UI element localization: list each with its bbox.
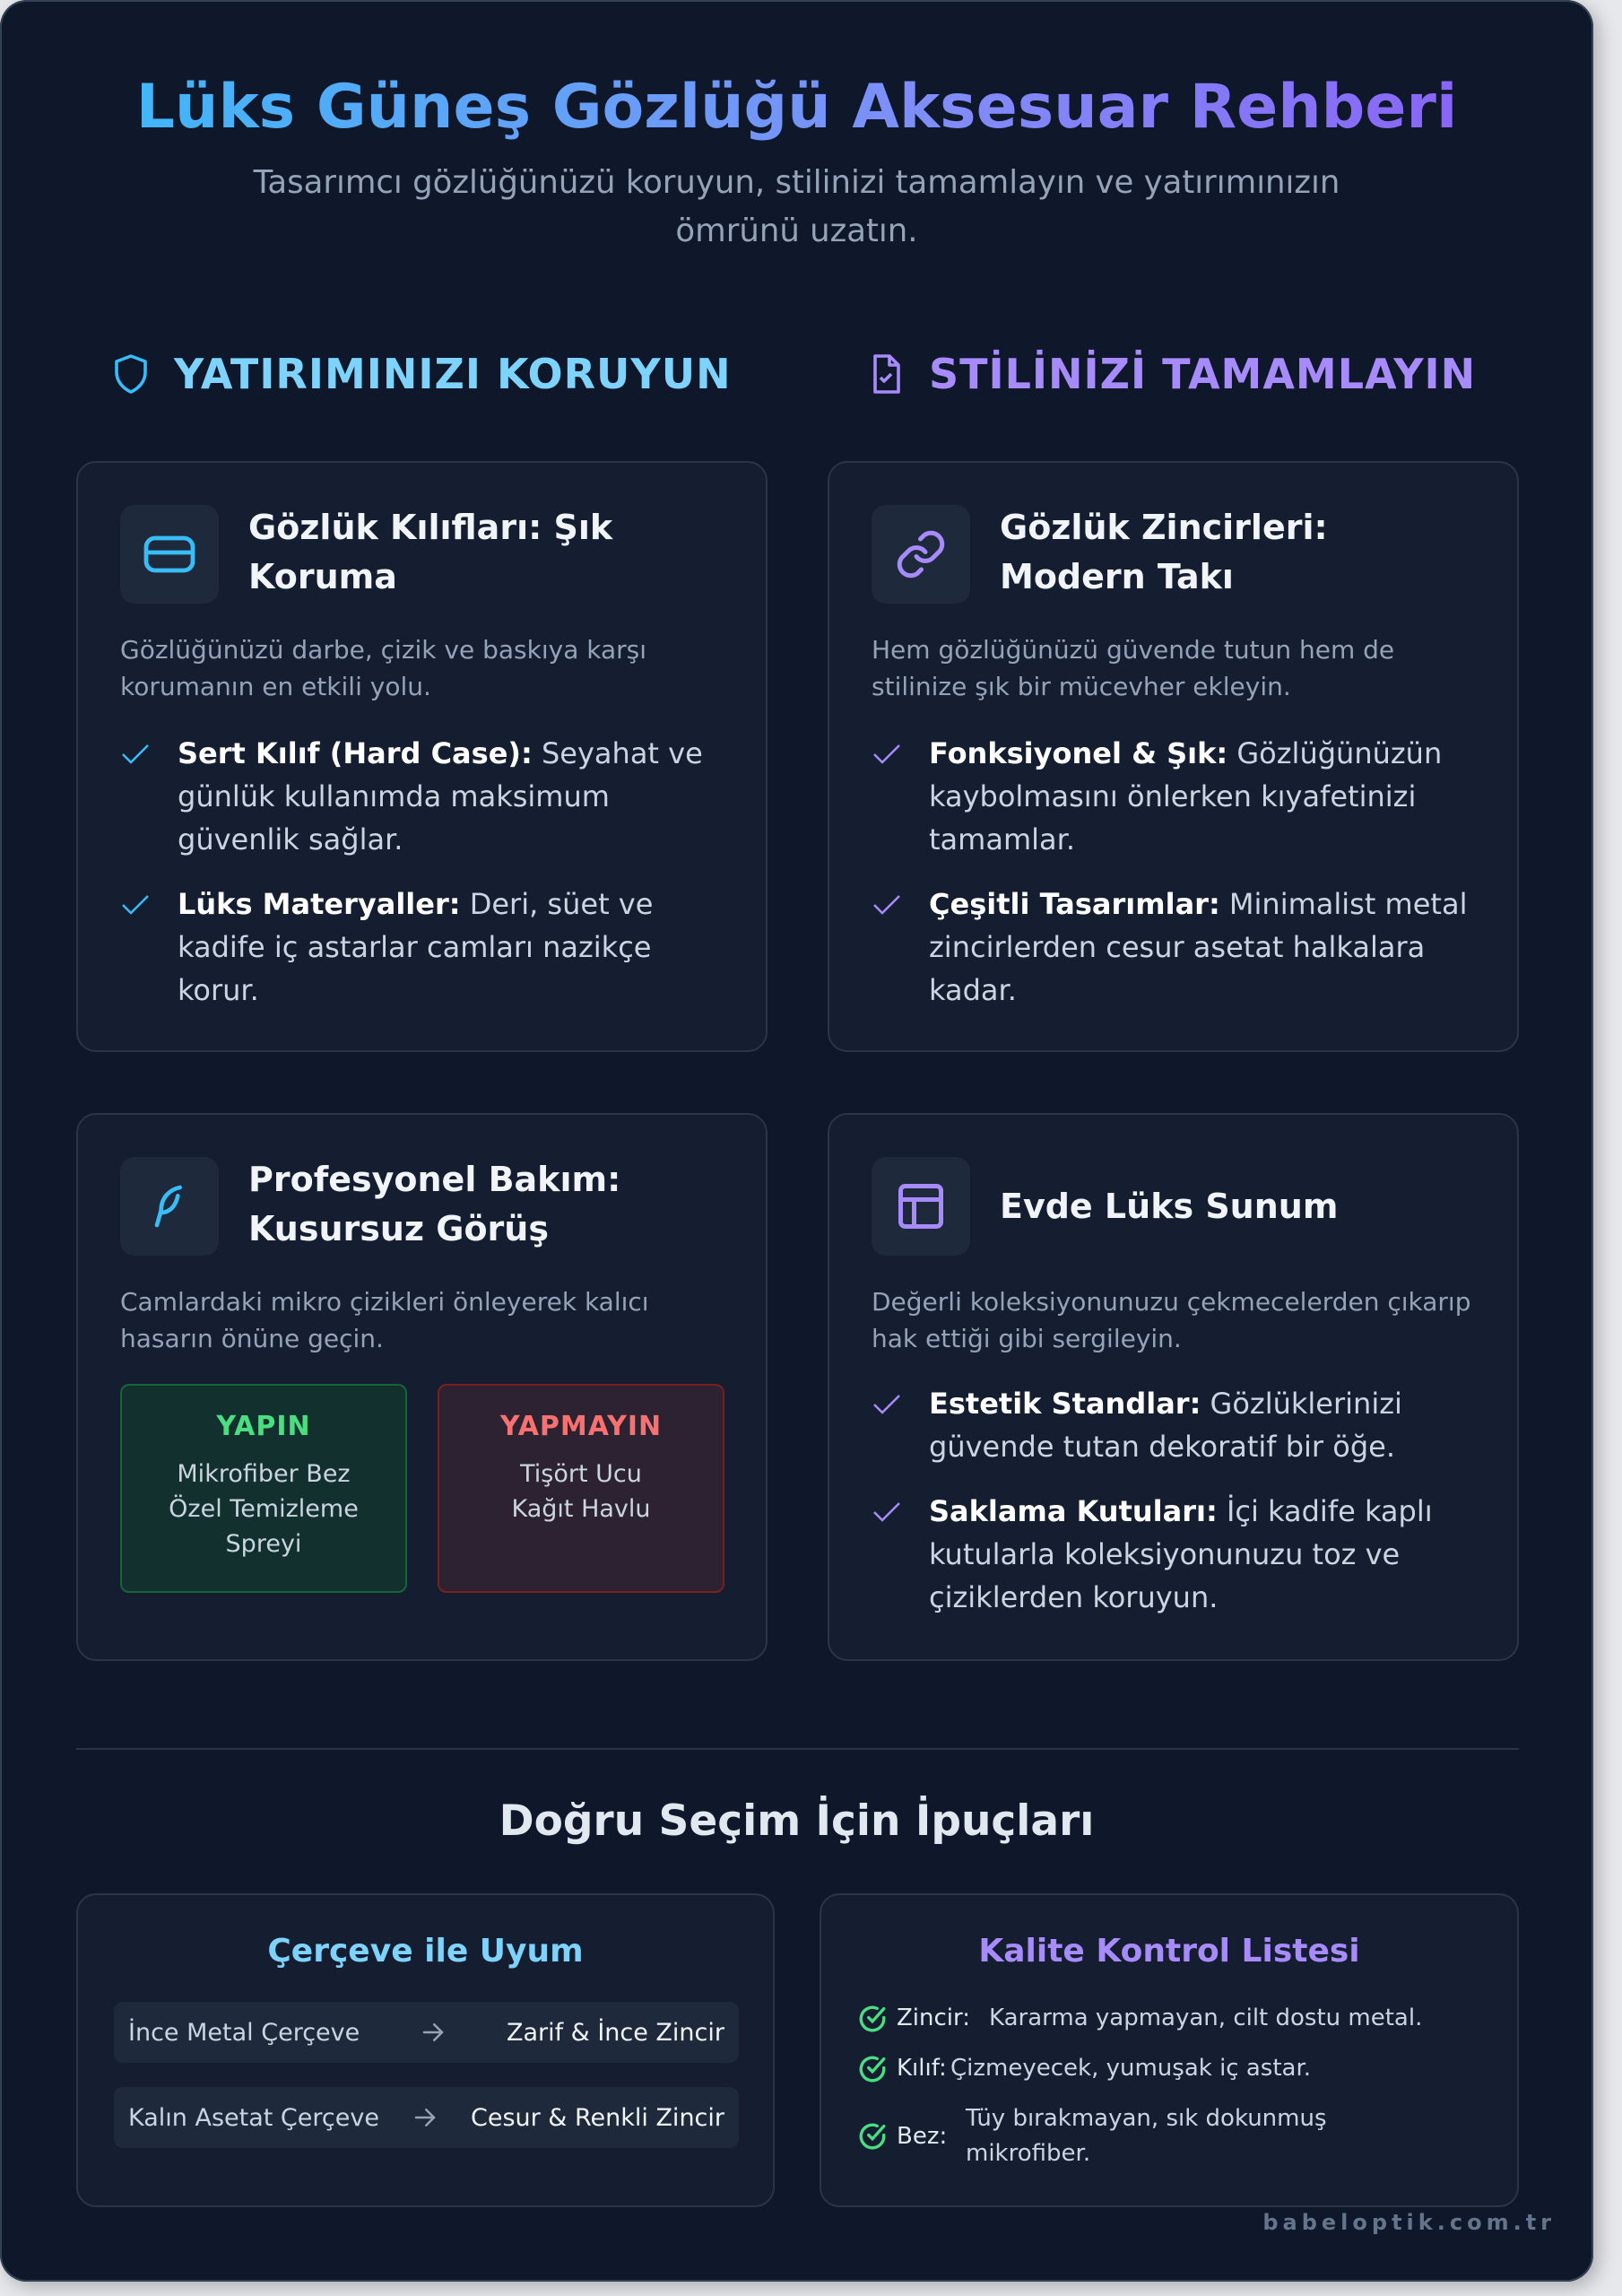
list: Sert Kılıf (Hard Case): Seyahat ve günlük kullanımda maksimum güvenlik sağlar. xyxy=(178,736,703,857)
panel: cases xyxy=(76,461,768,1052)
tips heading: Doğru Seçim İçin İpuçları xyxy=(499,1796,1094,1846)
panel: chains xyxy=(828,461,1519,1052)
row 2: Cesur & Renkli Zincir xyxy=(471,2104,724,2131)
panel: quality checklist xyxy=(820,1893,1519,2207)
check 1: Kararma yapmayan, cilt dostu metal. xyxy=(989,2005,1422,2031)
check 2: Çizmeyecek, yumuşak iç astar. xyxy=(950,2055,1311,2082)
panel: display xyxy=(828,1113,1519,1661)
section heading: protect: YATIRIMINIZI KORUYUN xyxy=(174,350,732,398)
description: Değerli koleksiyonunuzu çekmecelerden çıkarıp hak ettiği gibi sergileyin. xyxy=(872,1287,1470,1353)
list xyxy=(122,736,703,1007)
list: Fonksiyonel & Şık: Gözlüğünüzün kaybolmasını önlerken kıyafetinizi tamamlar. xyxy=(929,736,1442,857)
subtitle: Tasarımcı gözlüğünüzü koruyun, stilinizi tamamlayın ve yatırımınızın xyxy=(254,164,1340,201)
list: Estetik Standlar: Gözlüklerinizi güvende tutan dekoratif bir öğe. xyxy=(929,1387,1402,1464)
description: Hem gözlüğünüzü güvende tutun hem de stilinize şık bir mücevher ekleyin. xyxy=(872,635,1394,701)
subtitle: ömrünü uzatın. xyxy=(675,213,918,249)
icon: link xyxy=(872,505,970,604)
do box: Spreyi xyxy=(226,1530,301,1558)
list: Çeşitli Tasarımlar: Minimalist metal zincirlerden cesur asetat halkalara kadar. xyxy=(929,887,1467,1007)
description: Camlardaki mikro çizikleri önleyerek kalıcı hasarın önüne geçin. xyxy=(120,1287,649,1353)
list: Lüks Materyaller: Deri, süet ve kadife iç astarlar camları nazikçe korur. xyxy=(178,887,653,1007)
dont box: Tişört Ucu xyxy=(520,1460,642,1488)
dont box: YAPMAYIN xyxy=(500,1411,662,1442)
heading: Gözlük Zincirleri: Modern Takı xyxy=(1000,508,1328,596)
do box: YAPIN xyxy=(216,1411,311,1442)
icon: case xyxy=(120,505,219,604)
heading: Evde Lüks Sunum xyxy=(1000,1187,1338,1226)
heading: Kalite Kontrol Listesi xyxy=(978,1933,1360,1970)
icon: document xyxy=(873,354,900,394)
row 1 xyxy=(114,2002,739,2063)
check 3: Bez: xyxy=(897,2122,947,2149)
list xyxy=(873,1387,1433,1614)
dont box xyxy=(438,1384,724,1593)
row 2: Kalın Asetat Çerçeve xyxy=(128,2104,379,2131)
icon: layout xyxy=(872,1157,970,1256)
do box: Özel Temizleme xyxy=(169,1495,359,1523)
icon: feather xyxy=(120,1157,219,1256)
row 1: İnce Metal Çerçeve xyxy=(128,2018,360,2047)
title: Lüks Güneş Gözlüğü Aksesuar Rehberi xyxy=(136,72,1457,143)
heading: Profesyonel Bakım: Kusursuz Görüş xyxy=(248,1160,620,1248)
do box xyxy=(120,1384,407,1593)
list xyxy=(873,736,1467,1007)
section heading: style: STİLİNİZİ TAMAMLAYIN xyxy=(929,350,1476,398)
panel: frame match xyxy=(76,1893,775,2207)
footer: babeloptik.com.tr xyxy=(1262,2210,1556,2235)
check 2: Kılıf: xyxy=(897,2055,947,2082)
check 1: Zincir: xyxy=(897,2005,970,2031)
panel: care xyxy=(76,1113,768,1661)
description: Gözlüğünüzü darbe, çizik ve baskıya karşı korumanın en etkili yolu. xyxy=(120,635,646,701)
check 3: Tüy bırakmayan, sık dokunmuş mikrofiber. xyxy=(966,2105,1327,2167)
heading: Çerçeve ile Uyum xyxy=(267,1933,584,1970)
do box: Mikrofiber Bez xyxy=(177,1460,351,1488)
dont box: Kağıt Havlu xyxy=(511,1495,651,1523)
icon: shield xyxy=(115,354,147,394)
subtitle xyxy=(253,164,1340,249)
heading: Gözlük Kılıfları: Şık Koruma xyxy=(248,508,612,596)
row 1: Zarif & İnce Zincir xyxy=(507,2018,724,2047)
row 2 xyxy=(114,2087,739,2148)
list: Saklama Kutuları: İçi kadife kaplı kutularla koleksiyonunuzu toz ve çiziklerden koruyun. xyxy=(929,1494,1433,1614)
title xyxy=(0,63,1593,152)
